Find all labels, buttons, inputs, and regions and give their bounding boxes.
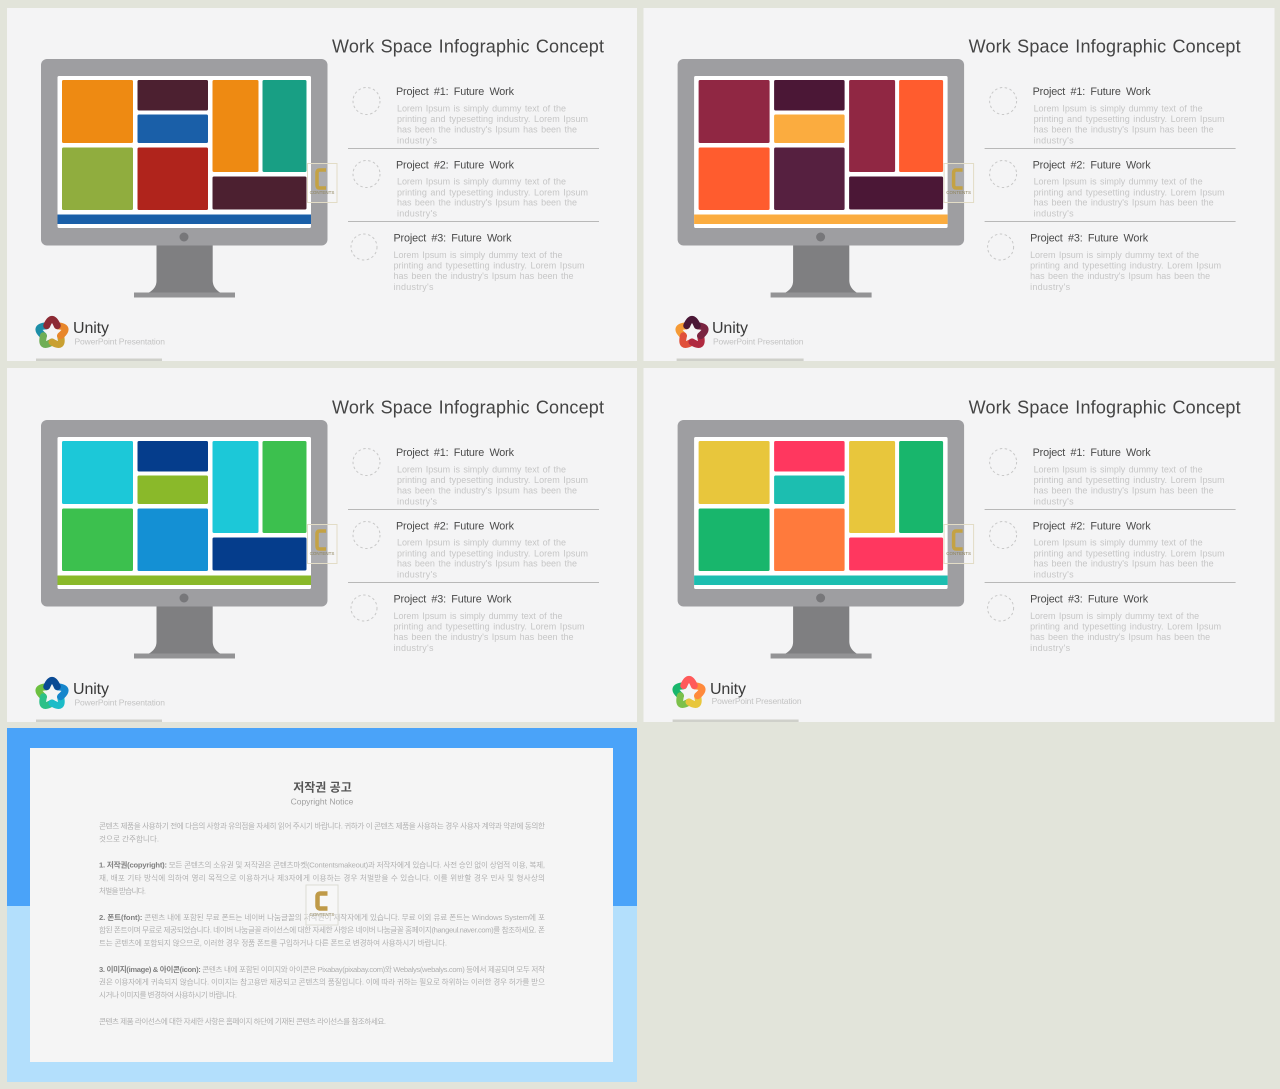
project 3: printing and typesetting industry. Lorem Ipsum <box>394 622 584 632</box>
project 2: Lorem Ipsum is simply dummy text of the <box>1034 538 1203 548</box>
logo: Unity: PowerPoint Presentation <box>712 696 802 706</box>
text block: section 2 font: 함된 폰트이며 무료로 제공되었습니다. 네이버 나눔글꼴 라이선스에 대한 자세한 사항은 네이버 나눔글꼴 홈페이지(hangeul.naver.com)를 참조하세요. 폰 <box>99 924 545 934</box>
project 1: has been the industry's Ipsum has been the <box>397 486 577 496</box>
logo: Unity: Unity <box>73 681 109 698</box>
project 3: Lorem Ipsum is simply dummy text of the <box>394 611 562 621</box>
text block: section 3 images: 3. 이미지(image) & 아이콘(icon): 콘텐츠 내에 포함된 이미지와 아이콘은 Pixabay(pixabay.com)와 Webalys(webalys.com) 등에서 제공되며 모두 저작 <box>99 964 545 974</box>
text block: section 3 images <box>99 964 545 1000</box>
project 3: Project #3: Future Work <box>1030 594 1149 606</box>
text block: section 1 copyright: 재, 배포 기타 방식에 의하여 영리 목적으로 이용하거나 제3자에게 이용하는 경우 처벌받을 수 있습니다. 이를 위반할 경우 민사 및 형사상의 <box>99 872 545 882</box>
panel: slide 3 cyan palette <box>7 368 637 722</box>
logo: Unity: Unity <box>73 320 109 337</box>
project 1: printing and typesetting industry. Lorem Ipsum <box>1034 475 1225 485</box>
project 3: Project #3: Future Work <box>394 232 512 244</box>
project 2: Project #2: Future Work <box>1033 160 1151 172</box>
project 2 <box>353 520 588 580</box>
project 2: Project #2: Future Work <box>396 520 515 532</box>
project 1: printing and typesetting industry. Lorem Ipsum <box>397 475 588 485</box>
project 1: Project #1: Future Work <box>1033 86 1151 98</box>
text block: section 1 copyright <box>99 860 545 896</box>
logo: Unity <box>679 319 804 346</box>
project 2: has been the industry's Ipsum has been the <box>397 558 577 568</box>
project 2: Lorem Ipsum is simply dummy text of the <box>397 176 566 186</box>
watermark badge <box>944 524 974 564</box>
panel: slide 2 burgundy palette <box>644 8 1274 361</box>
heading: copyright notice <box>291 780 354 806</box>
monitor illustration <box>41 59 328 298</box>
project 1: industry's <box>1034 136 1074 146</box>
logo: Unity: PowerPoint Presentation <box>74 336 165 346</box>
project 3 <box>351 594 584 653</box>
watermark badge: CONTENTS <box>946 190 971 195</box>
monitor illustration <box>41 420 328 658</box>
project 3 <box>351 232 584 292</box>
project 3: Lorem Ipsum is simply dummy text of the <box>394 250 562 260</box>
project 3: industry's <box>1030 643 1071 653</box>
text block: section 2 font: 2. 폰트(font): 콘텐츠 내에 포함된 무료 폰트는 네이버 나눔글꼴의 저작권이 저작자에게 있습니다. 무료 이외 유료 폰트는 Windows System에 포 <box>99 912 545 922</box>
project 3: printing and typesetting industry. Lorem Ipsum <box>394 260 584 270</box>
project 1 <box>990 447 1225 506</box>
project 1: Lorem Ipsum is simply dummy text of the <box>397 104 566 114</box>
project 3: has been the industry's Ipsum has been the <box>394 271 574 281</box>
project 1 <box>353 447 588 506</box>
text block: introduction: 콘텐츠 제품을 사용하기 전에 다음의 사항과 유의점을 자세히 읽어 주시기 바랍니다. 귀하가 이 콘텐츠 제품을 사용하는 경우 사용자 계약과 약관에 동의한 <box>99 820 545 830</box>
logo: Unity: Unity <box>712 320 748 337</box>
project 1: industry's <box>397 136 438 146</box>
watermark badge: CONTENTS <box>310 190 334 195</box>
project 2: industry's <box>397 208 438 218</box>
project 2 <box>990 520 1225 580</box>
title: Work Space Infographic Concept <box>969 398 1241 418</box>
monitor illustration <box>678 420 964 658</box>
text block: section 2 font <box>99 912 545 948</box>
project 2: printing and typesetting industry. Lorem Ipsum <box>1034 548 1225 558</box>
panel: slide 4 yellow palette <box>644 368 1274 722</box>
project 1: Project #1: Future Work <box>1033 447 1151 459</box>
project 2: printing and typesetting industry. Lorem Ipsum <box>1034 188 1225 198</box>
project 3: printing and typesetting industry. Lorem Ipsum <box>1030 260 1221 270</box>
logo: Unity: PowerPoint Presentation <box>713 336 804 346</box>
watermark badge: CONTENTS <box>310 551 334 556</box>
project 3 <box>988 594 1221 653</box>
watermark badge <box>308 164 337 202</box>
project 3: industry's <box>1030 282 1071 292</box>
project 1: has been the industry's Ipsum has been the <box>397 124 577 134</box>
project 2: has been the industry's Ipsum has been the <box>1034 198 1214 208</box>
project 1: printing and typesetting industry. Lorem Ipsum <box>1034 114 1225 124</box>
text block: section 1 copyright: 1. 저작권(copyright): 모든 콘텐츠의 소유권 및 저작권은 콘텐츠마켓(Contentsmakeout)과 저작자에게 있습니다. 사전 승인 없이 상업적 이용, 복제, <box>99 860 545 870</box>
title: Work Space Infographic Concept <box>332 36 604 56</box>
project 3: has been the industry's Ipsum has been the <box>1030 632 1210 642</box>
project 3: Project #3: Future Work <box>394 594 512 606</box>
heading: copyright notice: 저작권 공고 <box>293 780 352 794</box>
project 1: Project #1: Future Work <box>396 447 515 459</box>
project 3: industry's <box>394 643 434 653</box>
project 1: Lorem Ipsum is simply dummy text of the <box>397 464 566 474</box>
text block: section 2 font: 트는 콘텐츠에 포함되지 않으므로, 이러한 경우 정품 폰트를 구입하거나 다른 폰트로 변경하여 사용하시기 바랍니다. <box>99 938 447 948</box>
title: Work Space Infographic Concept <box>969 36 1241 56</box>
project 3: industry's <box>394 282 434 292</box>
logo: Unity <box>39 680 165 708</box>
watermark badge: CONTENTS <box>310 912 334 917</box>
logo: Unity: PowerPoint Presentation <box>74 698 165 708</box>
text block: section 3 images: 시거나 이미지를 변경하여 사용하시기 바랍니다. <box>99 990 237 1000</box>
project 3: has been the industry's Ipsum has been the <box>1030 271 1210 281</box>
logo: Unity <box>676 679 802 706</box>
project 2: Project #2: Future Work <box>396 160 515 172</box>
project 1 <box>353 86 588 146</box>
logo: Unity: Unity <box>710 681 746 698</box>
watermark badge <box>944 164 974 202</box>
panel: slide 1 orange palette <box>7 8 637 361</box>
project 1 <box>990 86 1225 146</box>
heading: copyright notice: Copyright Notice <box>291 796 354 806</box>
project 3: Lorem Ipsum is simply dummy text of the <box>1030 611 1199 621</box>
project 3: has been the industry's Ipsum has been the <box>394 632 574 642</box>
logo: Unity <box>39 319 165 346</box>
project 2: Project #2: Future Work <box>1033 520 1151 532</box>
text block: section 3 images: 권은 이용자에게 귀속되지 않습니다. 이미지는 참고용만 제공되고 콘텐츠의 품질입니다. 이에 따라 귀하는 필요로 하위하는 이러한 경우 허가를 받으 <box>99 976 545 986</box>
project 1: Lorem Ipsum is simply dummy text of the <box>1034 104 1203 114</box>
project 2 <box>353 160 588 218</box>
text block: introduction <box>99 820 545 844</box>
project 2: industry's <box>1034 208 1074 218</box>
project 2: has been the industry's Ipsum has been the <box>397 198 577 208</box>
watermark badge: CONTENTS <box>946 551 971 556</box>
project 2: industry's <box>1034 570 1074 580</box>
project 2: industry's <box>397 570 438 580</box>
project 2: Lorem Ipsum is simply dummy text of the <box>397 538 566 548</box>
text block: introduction: 것으로 간주합니다. <box>99 834 159 844</box>
project 1: printing and typesetting industry. Lorem Ipsum <box>397 114 588 124</box>
monitor illustration <box>678 59 964 298</box>
watermark badge <box>308 524 337 564</box>
title: Work Space Infographic Concept <box>332 398 604 418</box>
project 1: Project #1: Future Work <box>396 86 515 98</box>
project 1: has been the industry's Ipsum has been the <box>1034 124 1214 134</box>
project 2: has been the industry's Ipsum has been the <box>1034 558 1214 568</box>
project 3: Lorem Ipsum is simply dummy text of the <box>1030 250 1199 260</box>
project 2: printing and typesetting industry. Lorem Ipsum <box>397 188 588 198</box>
text block: license note: 콘텐츠 제품 라이선스에 대한 자세한 사항은 홈페이지 하단에 기재된 콘텐츠 라이선스를 참조하세요. <box>99 1016 386 1026</box>
panel: copyright notice slide <box>7 728 637 1082</box>
project 1: has been the industry's Ipsum has been the <box>1034 486 1214 496</box>
project 2 <box>990 160 1225 218</box>
project 3: printing and typesetting industry. Lorem Ipsum <box>1030 622 1221 632</box>
project 1: industry's <box>1034 496 1074 506</box>
project 2: Lorem Ipsum is simply dummy text of the <box>1034 176 1203 186</box>
text block: section 1 copyright: 처벌을 받습니다. <box>99 886 146 896</box>
project 1: industry's <box>397 496 438 506</box>
watermark badge <box>306 885 338 925</box>
project 2: printing and typesetting industry. Lorem Ipsum <box>397 548 588 558</box>
project 1: Lorem Ipsum is simply dummy text of the <box>1034 464 1203 474</box>
project 3: Project #3: Future Work <box>1030 232 1149 244</box>
project 3 <box>988 232 1221 292</box>
